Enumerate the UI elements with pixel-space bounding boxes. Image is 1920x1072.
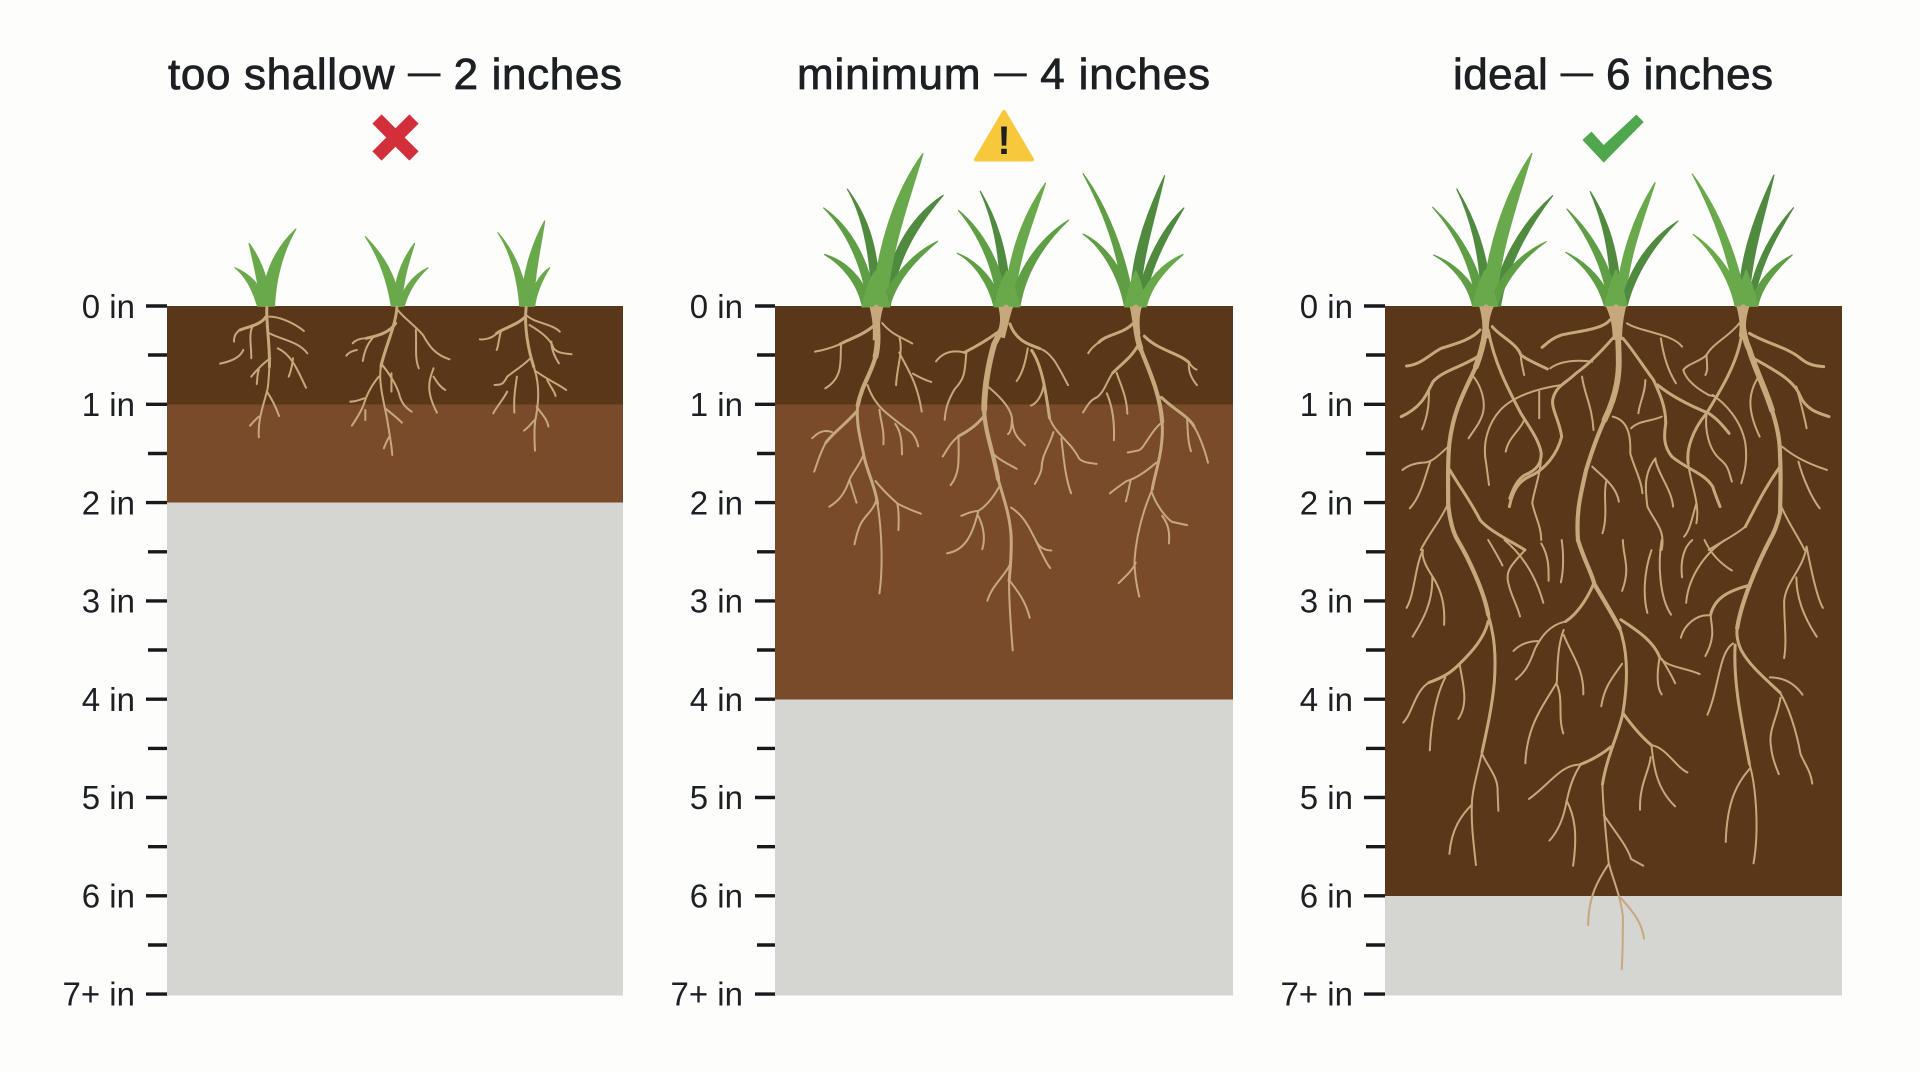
roots: fine <box>1429 584 1780 784</box>
title: ideal: 6 inches <box>1593 50 1773 99</box>
depth axis: 3 in <box>690 582 743 620</box>
depth axis <box>1281 288 1385 1012</box>
depth axis: 4 in <box>1300 681 1353 718</box>
depth axis: 4 in <box>690 681 743 718</box>
depth axis: 5 in <box>690 779 743 816</box>
panel: minimum, 4 inches <box>671 50 1233 1012</box>
depth axis: 7+ in <box>63 976 135 1012</box>
grass blades <box>1433 153 1794 306</box>
grass plants and shallow roots <box>220 221 572 455</box>
panel: ideal, 6 inches <box>1281 50 1842 1012</box>
depth axis: 6 in <box>690 878 743 914</box>
depth axis: 1 in <box>82 386 135 423</box>
depth axis <box>63 288 167 1012</box>
roots: hair <box>812 323 1208 650</box>
depth axis: 0 in <box>82 288 135 325</box>
roots: hair <box>1402 323 1827 550</box>
roots: hair <box>1403 540 1823 969</box>
lower deep roots <box>1403 540 1823 969</box>
depth axis: 5 in <box>82 779 135 816</box>
depth axis: 3 in <box>1300 582 1353 620</box>
panel: too shallow, 2 inches <box>63 50 623 1012</box>
depth axis: 0 in <box>1300 288 1353 325</box>
title: minimum: — <box>994 54 1026 90</box>
title: too shallow: — <box>408 54 440 90</box>
icon: red cross <box>377 119 414 156</box>
roots: medium <box>1458 540 1770 628</box>
title: ideal: — <box>1561 54 1593 90</box>
depth axis: 1 in <box>1300 386 1353 423</box>
roots: thick <box>875 308 1140 410</box>
roots: fine <box>1401 320 1829 550</box>
roots: root-collar flares <box>1479 306 1749 340</box>
grass blades <box>824 154 1184 307</box>
grass plants, check icon and upper deep roots <box>1401 115 1829 550</box>
icon: warning triangle: ! <box>997 119 1011 163</box>
soil profile: 6 inch topsoil over subsoil <box>1385 306 1842 996</box>
depth axis: 7+ in <box>671 976 743 1012</box>
title: too shallow: 2 inches <box>441 50 622 99</box>
depth axis: 3 in <box>82 582 135 620</box>
roots: medium <box>858 348 1162 479</box>
title: too shallow: too shallow <box>168 50 395 99</box>
grass blades <box>235 221 550 306</box>
roots: root-collar flares <box>870 307 1142 340</box>
depth axis: 2 in <box>1300 484 1353 522</box>
roots: medium <box>1448 367 1781 540</box>
depth axis: 5 in <box>1300 779 1353 816</box>
depth axis <box>671 288 775 1012</box>
depth axis: 0 in <box>690 288 743 325</box>
depth axis: 7+ in <box>1281 976 1353 1012</box>
depth axis: 1 in <box>690 386 743 423</box>
depth axis: 2 in <box>690 484 743 522</box>
depth axis: 4 in <box>82 681 135 718</box>
icon: green check mark <box>1582 115 1644 163</box>
grass plants and medium roots <box>812 154 1208 650</box>
roots <box>240 307 534 367</box>
depth axis: 2 in <box>82 484 135 522</box>
roots: thick <box>1476 307 1772 420</box>
soil profile: 2 inch topsoil over subsoil <box>167 306 623 996</box>
title: minimum: minimum <box>797 50 980 99</box>
title: ideal: ideal <box>1453 50 1548 99</box>
title: minimum: 4 inches <box>1027 50 1210 99</box>
roots: fine <box>826 324 1194 581</box>
soil profile: 4 inch topsoil over subsoil <box>775 306 1233 996</box>
depth axis: 6 in <box>82 878 135 914</box>
icon: warning triangle <box>976 112 1032 163</box>
depth axis: 6 in <box>1300 878 1353 914</box>
